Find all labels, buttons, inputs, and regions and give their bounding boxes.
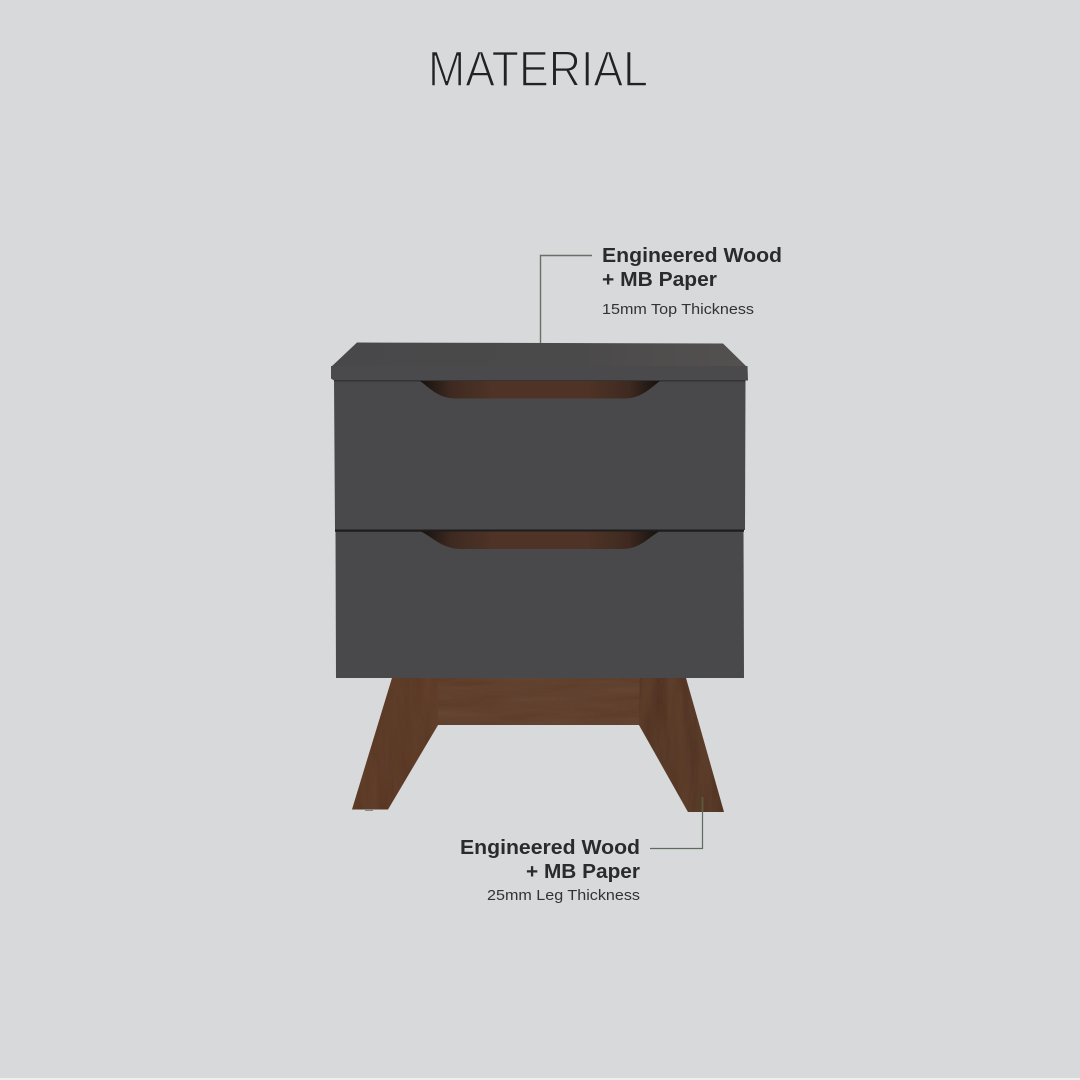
- callout heading: leg: Engineered Wood: [460, 836, 640, 859]
- lower drawer handle cut-out: [421, 532, 659, 549]
- leader line: top: [540, 256, 592, 343]
- right leg: [639, 678, 724, 812]
- callout heading: leg: [460, 836, 640, 883]
- left foot glide: [365, 809, 373, 811]
- left leg: [352, 678, 438, 810]
- legs and rail: [352, 678, 724, 812]
- back rail: [436, 678, 642, 725]
- callout heading: top: Engineered Wood: [602, 244, 782, 267]
- upper drawer: [334, 380, 746, 530]
- callout: leg material: [460, 797, 702, 904]
- upper drawer handle cut-out: [420, 381, 660, 398]
- callout: top material: [540, 244, 782, 343]
- callout heading: top: + MB Paper: [602, 268, 717, 291]
- title: MATERIAL: [428, 41, 648, 97]
- callout detail: leg: 25mm Leg Thickness: [487, 887, 640, 904]
- leader line: leg: [650, 811, 702, 848]
- nightstand: [331, 342, 748, 812]
- callout detail: top: 15mm Top Thickness: [602, 301, 754, 318]
- lower drawer: [335, 531, 744, 678]
- callout heading: top: [602, 244, 782, 291]
- table top: [331, 342, 748, 380]
- callout heading: leg: + MB Paper: [526, 860, 640, 883]
